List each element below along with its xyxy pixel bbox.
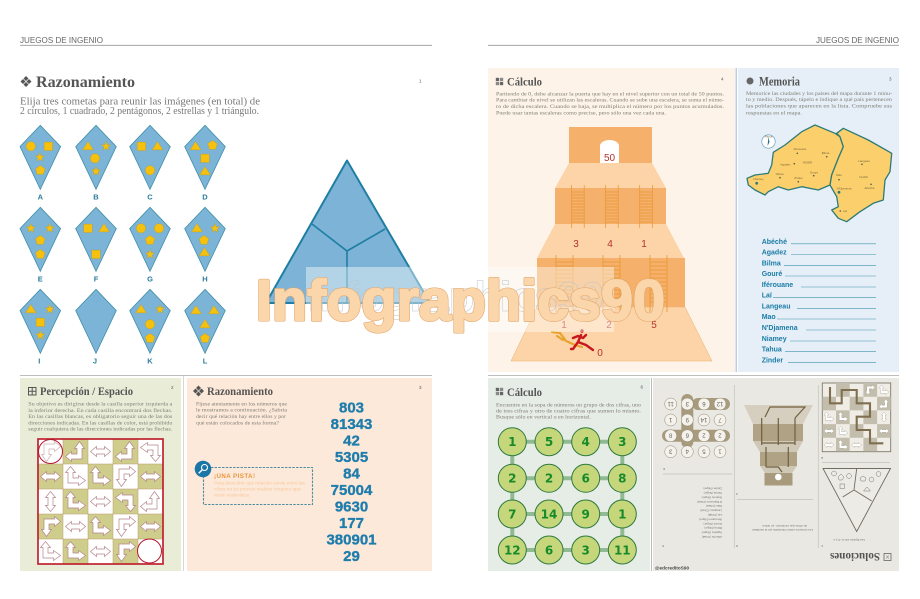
- solution answers text (upside down): Tahua (Níger): [704, 491, 722, 495]
- solution 6: number soup: 7: [718, 416, 722, 422]
- instructions text: Para cambiar de nivel se utilizan las escaleras. Cuando se sube una escalera, se suma el núme-: [496, 98, 724, 104]
- map labels and city dots: CHAD: [859, 175, 869, 179]
- instructions text: ro de dicha escalera. Cuando se baja, se multiplica el número por los puntos acumulados.: [496, 104, 725, 110]
- instructions text: to y medio. Después, tápelo e indique a qué país pertenecen: [746, 97, 892, 103]
- solution 4: pyramid route: [744, 405, 813, 486]
- map labels and city dots: Zinder: [794, 176, 803, 180]
- solution answers text (upside down): Iférouane (Níger): [699, 517, 722, 521]
- door with target 50: [600, 140, 619, 164]
- solution answers text (upside down): Mao (Chad): [706, 504, 722, 508]
- kite I: I: [38, 356, 40, 365]
- instructions text: [746, 91, 892, 116]
- solution answers text (upside down): Abéché (Chad): [702, 535, 722, 539]
- map labels and city dots: Bilma: [822, 151, 830, 155]
- map labels and city dots: N'Djamena: [837, 186, 852, 190]
- heading: Calculo: Cálculo: [507, 385, 542, 399]
- instructions text: [196, 402, 288, 426]
- hint box: [195, 461, 312, 504]
- pyramid of levels: [511, 127, 712, 361]
- panel: calculo 1 pyramid: [488, 68, 735, 372]
- number column: [326, 400, 377, 565]
- solution 6: number soup: 3: [685, 400, 689, 406]
- number circles network: 11: [614, 543, 631, 557]
- solution 6: number soup: 1: [718, 448, 722, 454]
- instructions text: la inferior derecha. En cada casilla encontrará dos flechas.: [28, 407, 173, 414]
- instructions text: Partiendo de 0, debe alcanzar la puerta que hay en el nivel superior con un total de 50 puntos.: [496, 92, 725, 98]
- solution answers text (upside down): Langeau (Chad): [700, 509, 722, 513]
- icon: locator circle: África: [765, 134, 773, 138]
- instructions text: Fíjese atentamente en los números que: [196, 402, 288, 408]
- solution 6: number soup: 14: [700, 416, 707, 422]
- ladder numbers: 0: [597, 348, 603, 359]
- kite L: L: [203, 356, 208, 365]
- solution 6: number soup: 1: [668, 416, 672, 422]
- kite I: [20, 289, 61, 365]
- number circles network: 6: [545, 543, 553, 557]
- kite H: H: [202, 274, 208, 283]
- number circles network: 7: [508, 507, 516, 521]
- instructions text: direcciones indicadas. En las casillas de color, está prohibido: [28, 420, 173, 426]
- number circles network: 5: [545, 435, 553, 449]
- instructions text: le mostramos a continuación. ¿Sabría: [196, 408, 288, 414]
- instructions text: respuestas en el mapa.: [746, 110, 803, 116]
- heading: Calculo: Cálculo: [507, 75, 542, 89]
- number column: 84: [343, 466, 360, 483]
- instructions text: decir qué relación hay entre ellos y por: [196, 414, 286, 420]
- list of cities with write-in lines: N'Djamena: [762, 325, 798, 332]
- solution 2: maze path: [822, 383, 891, 452]
- map labels and city dots: Mao: [836, 173, 842, 177]
- number circles network: 1: [618, 507, 626, 521]
- ladder numbers: [561, 239, 657, 359]
- kite A: [20, 125, 61, 201]
- heading: Razonamiento: [193, 385, 422, 398]
- solution answers text (upside down): 5: [662, 544, 664, 548]
- number column: 29: [343, 548, 360, 565]
- solution answers text (upside down): Zinder (Níger): [703, 487, 722, 491]
- ladder numbers: 1: [641, 239, 647, 250]
- solution 6: number soup: 6: [702, 400, 706, 406]
- ladders: [556, 185, 667, 312]
- panel: razonamiento 2: [187, 378, 432, 571]
- solution 6: number soup: [665, 398, 726, 458]
- solution 1: inverted triangle: [823, 468, 890, 532]
- number circles network: 3: [618, 435, 626, 449]
- kite G: G: [147, 274, 153, 283]
- instructions text: Memorice las ciudades y los países del mapa durante 1 minu-: [746, 91, 892, 97]
- solution answers text (upside down): 6: [663, 467, 665, 471]
- map labels and city dots: Iférouane: [794, 147, 807, 151]
- kite B: B: [93, 192, 99, 201]
- divider right page: [488, 374, 899, 376]
- number circles network: 1: [508, 435, 516, 449]
- icon: running figure: [552, 329, 593, 350]
- number column: 9630: [335, 499, 368, 516]
- kite D: [185, 125, 225, 201]
- instructions text: Su objetivo es dirigirse desde la casilla superior izquierda a: [28, 402, 173, 408]
- kites grid: [20, 125, 225, 365]
- kite D: D: [202, 192, 208, 201]
- instructions text: las poblaciones que aparecen en la lista. Compruebe sus: [746, 103, 892, 109]
- number column: 803: [339, 400, 364, 416]
- start circle: [38, 440, 62, 464]
- header: left page: JUEGOS DE INGENIO: [20, 35, 103, 45]
- number circles network: 2: [508, 472, 516, 486]
- arrow maze grid: [38, 439, 163, 564]
- heading: Calculo: [496, 75, 724, 89]
- heading: Calculo: [496, 384, 644, 399]
- solution 6: number soup: 2: [702, 432, 706, 438]
- instructions text: [28, 402, 173, 433]
- heading: Memoria: Memoria: [759, 74, 801, 88]
- instructions text: qué están colocados de esta forma?: [196, 419, 280, 426]
- list of cities with write-in lines: Langeau: [762, 303, 790, 310]
- number circles network: 2: [545, 472, 553, 486]
- list of cities with write-in lines: Bilma: [762, 260, 781, 267]
- heading: Razonamiento: Razonamiento: [36, 74, 135, 91]
- solution answers text (upside down): Agadez (Níger): [702, 531, 722, 535]
- kite K: [130, 289, 170, 365]
- number circles network: 14: [541, 507, 557, 521]
- map labels and city dots: Niamey: [753, 177, 764, 181]
- kite F: F: [94, 274, 99, 283]
- hint box: Para descubrir qué relación existe entre las: [214, 480, 305, 486]
- panel: soluciones (upside down): [653, 378, 899, 571]
- watermark: letter outline: Infographics90: [256, 269, 665, 333]
- panel: memoria: [738, 68, 899, 372]
- solution 6: number soup: 11: [667, 400, 674, 406]
- kite E: E: [38, 274, 43, 283]
- solutions heading (upside down): Soluciones: [830, 550, 880, 564]
- large triangle divided into three: [266, 160, 430, 303]
- instructions text: [20, 96, 260, 117]
- end circle: [138, 539, 162, 563]
- instructions text: 2 círculos, 1 cuadrado, 2 pentágonos, 2 estrellas y 1 triángulo.: [20, 106, 259, 117]
- number column: 380901: [326, 532, 377, 549]
- list of cities with write-in lines: Niamey: [762, 336, 787, 343]
- ladder numbers: 4: [607, 239, 613, 250]
- solution 6: number soup: 8: [668, 432, 672, 438]
- instructions text: Encuentre en la sopa de números un grupo de dos cifras, uno: [496, 402, 641, 409]
- solution answers text (upside down): N'Djamena (Chad): [697, 500, 722, 504]
- watermark: translucent band: [306, 267, 614, 332]
- kite J: [76, 289, 116, 365]
- number circles network: 9: [582, 507, 590, 521]
- number circles network: 12: [504, 543, 521, 557]
- heading: Razonamiento: [20, 74, 422, 91]
- heading: Percepcion / Espacio: [28, 385, 174, 398]
- solution 6: number soup: 3: [668, 448, 672, 454]
- list of cities with write-in lines: Zinder: [762, 358, 783, 365]
- map of Niger and Chad: [747, 125, 892, 222]
- number circles network: 6: [582, 472, 590, 486]
- header: right page: JUEGOS DE INGENIO: [816, 35, 899, 45]
- number column: 81343: [331, 416, 372, 433]
- map labels and city dots: Abéché: [864, 186, 875, 190]
- solution answers text (upside down): de cifras que contienen, en orden.: [761, 524, 807, 528]
- solution 6: number soup: 5: [702, 448, 706, 454]
- panel separator: [650, 378, 652, 571]
- kite G: [130, 207, 170, 283]
- instructions text: Busque sólo en vertical o en horizontal.: [496, 415, 592, 421]
- heading: Calculo: 6: [640, 384, 644, 390]
- map labels and city dots: [753, 147, 875, 213]
- icon: locator circle: [762, 134, 775, 148]
- ladder numbers: 1: [561, 320, 567, 331]
- solution answers text (upside down): 3: [736, 544, 738, 548]
- ladder numbers: 3: [573, 239, 579, 250]
- solution answers text (upside down): Bilma (Níger): [704, 526, 722, 530]
- kite L: [185, 289, 225, 365]
- map labels and city dots: Tahua: [775, 172, 784, 176]
- kite C: [130, 125, 170, 201]
- ladder numbers: 5: [651, 320, 657, 331]
- hint box: ración matemática.: [214, 492, 250, 498]
- map labels and city dots: NIGER: [803, 160, 813, 164]
- list of cities with write-in lines: Gouré: [762, 271, 782, 278]
- kite E: [20, 207, 61, 283]
- solution answers text (upside down): Los números están colocados por la cantidad: [752, 528, 813, 532]
- instructions text: Puede usar tantas escaleras como precise, pero sólo una vez cada una.: [496, 110, 667, 116]
- panel: calculo 2 number soup: [488, 378, 650, 571]
- heading: Razonamiento: Razonamiento: [207, 386, 273, 398]
- list of cities with write-in lines: [762, 239, 876, 365]
- hint box: cifras no es preciso realizar ninguna ope-: [214, 486, 303, 492]
- solution answers text (upside down): [662, 456, 865, 548]
- panel: razonamiento 1: [20, 74, 430, 365]
- list of cities with write-in lines: Iférouane: [762, 282, 793, 289]
- solution answers text (upside down): 4: [736, 492, 738, 496]
- door with target 50: 50: [604, 153, 615, 164]
- map labels and city dots: Agadez: [780, 162, 791, 166]
- kite H: [185, 207, 225, 283]
- solution 6: number soup: 12: [716, 400, 723, 406]
- number column: 5305: [335, 449, 368, 466]
- divider left page: [20, 374, 432, 376]
- map labels and city dots: Langeau: [858, 159, 870, 163]
- credit: @edcreditoS90: [655, 566, 689, 570]
- solution 6: number soup: 4: [685, 448, 689, 454]
- heading: Memoria: [746, 74, 892, 88]
- panel separator: [735, 68, 737, 372]
- solution 6: number soup: 2: [718, 432, 722, 438]
- icon: magnifying glass: [195, 461, 211, 477]
- instructions text: de tres cifras y otro de cuatro cifras que sumen lo mismo.: [496, 408, 642, 415]
- number circles network: [498, 428, 636, 564]
- ladder numbers: 2: [606, 320, 612, 331]
- heading: Razonamiento: 3: [419, 385, 422, 390]
- panel: percepcion / espacio: [20, 376, 184, 571]
- kite C: C: [147, 192, 153, 201]
- number column: 42: [343, 432, 360, 450]
- solution answers text (upside down): 1: [821, 544, 823, 548]
- kite F: [76, 207, 116, 283]
- kite J: J: [93, 356, 97, 365]
- number column: 177: [339, 515, 364, 532]
- heading: Memoria: 3: [889, 76, 892, 82]
- kite B: [76, 125, 116, 201]
- heading: Razonamiento: 1: [419, 78, 422, 84]
- watermark: outlined text: Infographics90: [308, 273, 604, 320]
- list of cities with write-in lines: Abéché: [762, 239, 787, 246]
- list of cities with write-in lines: Laï: [762, 293, 773, 300]
- kite A: A: [38, 192, 44, 201]
- solution 6: number soup: 6: [685, 432, 689, 438]
- heading: Calculo: 4: [721, 76, 724, 82]
- number circles network: 8: [618, 472, 626, 486]
- instructions text: [496, 402, 642, 421]
- list of cities with write-in lines: Mao: [762, 314, 776, 321]
- map labels and city dots: Gouré: [810, 170, 818, 174]
- number circles network: 3: [582, 543, 590, 557]
- solution answers text (upside down): Las figuras son A, D y L.: [832, 538, 865, 542]
- solution answers text (upside down): 2: [821, 456, 823, 460]
- instructions text: En las casillas blancas, es obligatorio seguir una de las dos: [28, 414, 172, 420]
- solution answers text (upside down): Laï (Chad): [708, 513, 722, 517]
- instructions text: Elija tres cometas para reunir las imágenes (en total) de: [20, 96, 260, 107]
- hint box: ¡UNA PISTA!: [214, 473, 255, 480]
- watermark: Infographics90: Infographics90: [256, 269, 665, 333]
- solution answers text (upside down): Niamey (Níger): [702, 495, 722, 499]
- number circles network: 4: [582, 435, 590, 449]
- number column: 75004: [331, 482, 373, 499]
- heading: Percepcion / Espacio: Percepción / Espacio: [40, 386, 133, 398]
- instructions text: [496, 92, 725, 116]
- solution answers text (upside down): Gouré (Níger): [703, 522, 722, 526]
- heading: Percepcion / Espacio: 2: [171, 385, 174, 390]
- list of cities with write-in lines: Agadez: [762, 250, 787, 257]
- list of cities with write-in lines: Tahua: [762, 347, 782, 354]
- instructions text: seguir cualquiera de las direcciones indicadas por las flechas.: [28, 426, 173, 433]
- solution 6: number soup: 9: [685, 416, 689, 422]
- map labels and city dots: Laï: [843, 209, 847, 213]
- kite K: K: [147, 356, 153, 365]
